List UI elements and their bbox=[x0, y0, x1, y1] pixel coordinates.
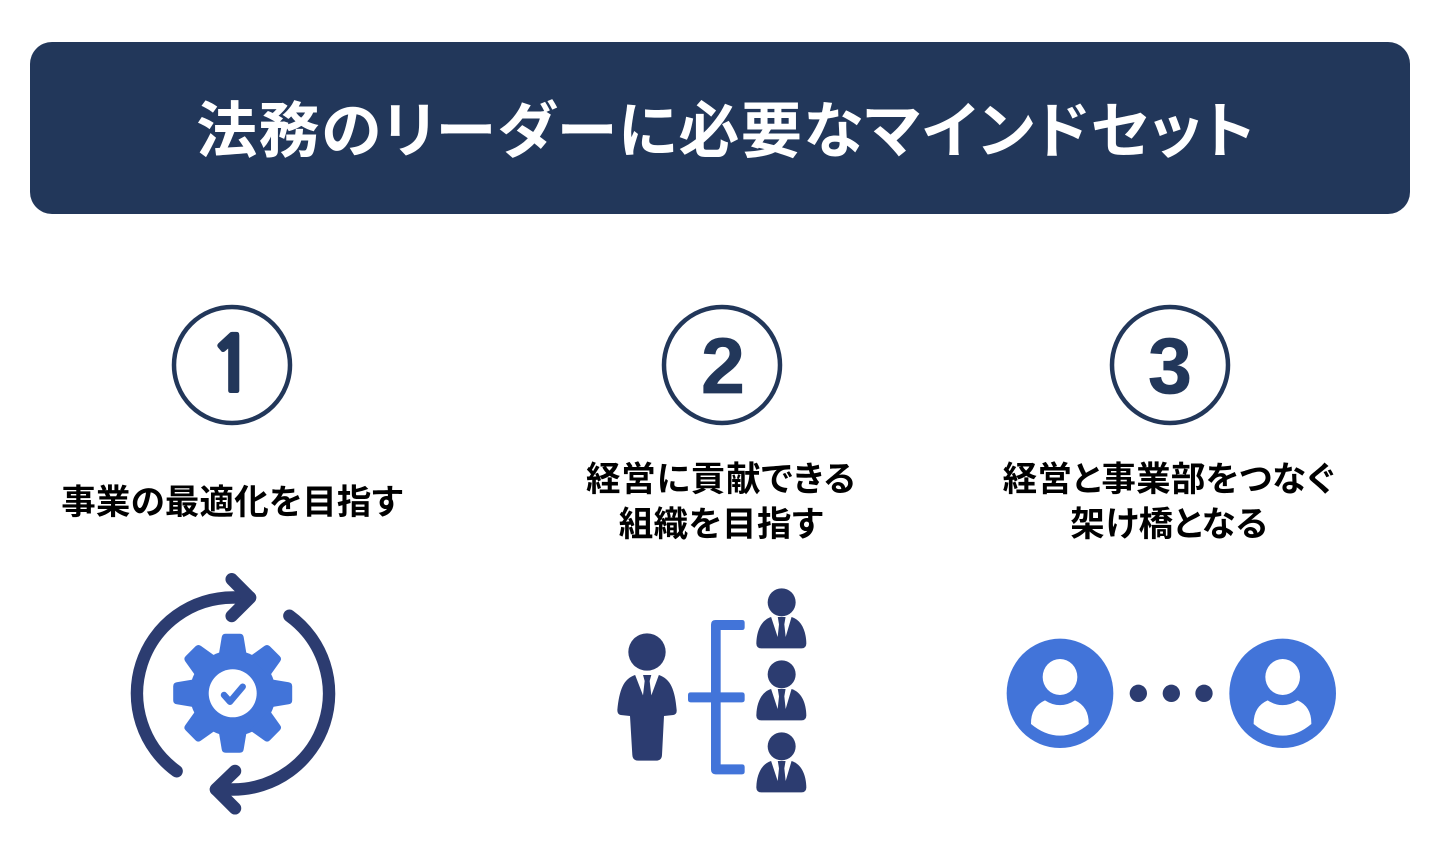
team member 3 bbox=[756, 732, 806, 792]
connecting dots bbox=[1130, 685, 1213, 702]
person left bbox=[1007, 639, 1113, 748]
label 2: 経営に貢献できる bbox=[586, 461, 856, 499]
number badge 1 bbox=[174, 307, 290, 423]
icon: organization chart bbox=[617, 588, 806, 792]
label 3: 架け橋となる bbox=[1070, 506, 1268, 544]
label 1: 事業の最適化を目指す bbox=[61, 484, 403, 522]
person right bbox=[1229, 639, 1336, 748]
leader figure bbox=[617, 633, 677, 761]
title banner bbox=[30, 42, 1410, 214]
icon: gear with circular arrows bbox=[137, 579, 329, 808]
title: 法務のリーダーに必要なマインドセット bbox=[196, 97, 1256, 165]
number badge 2: 2 bbox=[701, 321, 745, 410]
label 3: 経営と事業部をつなぐ bbox=[1003, 461, 1334, 499]
label 2: 組織を目指す bbox=[619, 506, 823, 544]
label 2 bbox=[586, 461, 856, 544]
team member 1 bbox=[756, 588, 806, 648]
number badge 2 bbox=[664, 307, 780, 423]
number badge 3: 3 bbox=[1148, 321, 1192, 410]
label 3 bbox=[1003, 461, 1334, 544]
connector bracket bbox=[688, 620, 745, 774]
number badge 1: 1 bbox=[209, 328, 255, 404]
team member 2 bbox=[756, 660, 806, 720]
icon: two people connected by dots bbox=[1007, 639, 1336, 748]
number badge 3 bbox=[1112, 307, 1228, 423]
